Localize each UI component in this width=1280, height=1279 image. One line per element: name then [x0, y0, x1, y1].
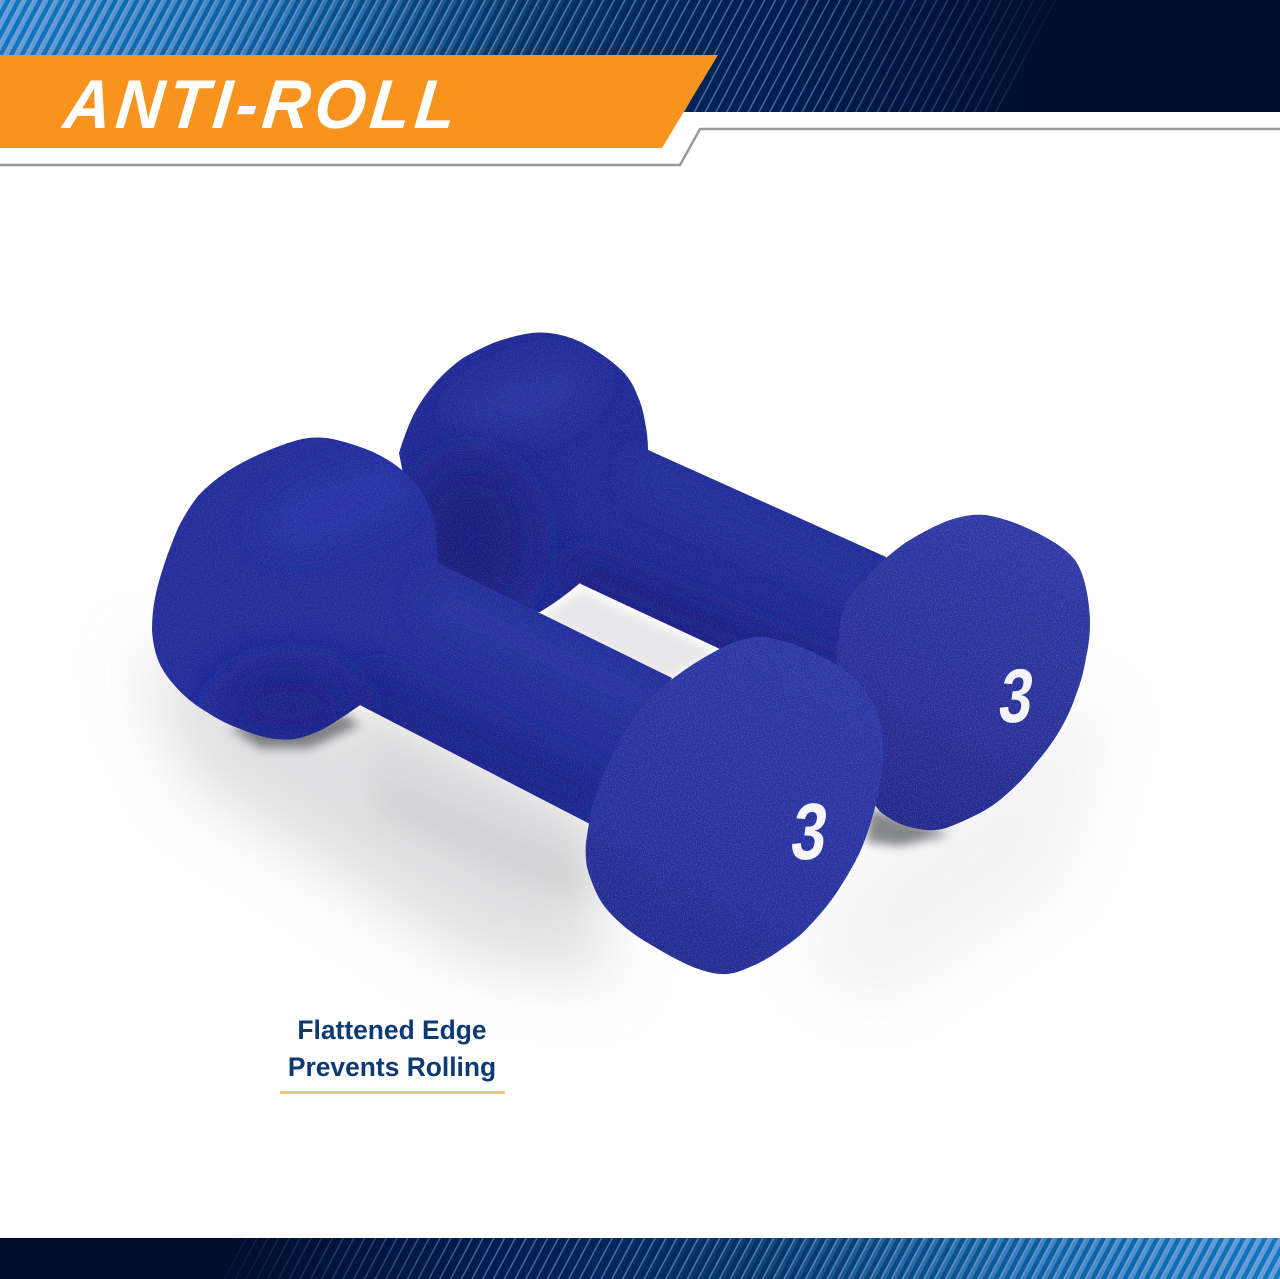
rear dumbbell head and handle — [399, 332, 886, 664]
front weight number: 3 — [786, 788, 833, 877]
front dumbbell head and handle — [140, 425, 680, 835]
orange heading ribbon — [0, 55, 718, 148]
rear dumbbell right head — [836, 514, 1090, 830]
rear weight number: 3 — [994, 653, 1039, 739]
bottom banner with diagonal stripes — [0, 1238, 1280, 1279]
front dumbbell right head — [586, 637, 883, 974]
icon: front dumbbell — [140, 425, 895, 980]
floor shadows — [135, 590, 1110, 1000]
title: ANTI-ROLL — [58, 67, 464, 143]
icon: rear dumbbell — [380, 320, 1100, 840]
top banner with diagonal stripes — [0, 0, 1280, 112]
caption — [288, 1015, 496, 1082]
caption underline — [280, 1091, 505, 1094]
grey outline rule under banner — [0, 129, 1280, 165]
caption: Prevents Rolling — [288, 1052, 496, 1082]
caption: Flattened Edge — [297, 1015, 487, 1045]
